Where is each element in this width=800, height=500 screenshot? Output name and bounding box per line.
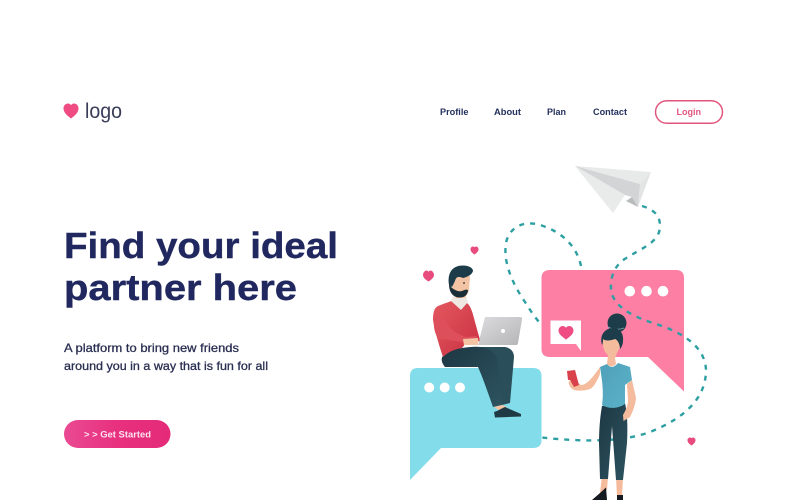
heading: Find your ideal	[64, 225, 338, 266]
woman arm right	[623, 380, 636, 421]
icon: logo heart	[64, 104, 78, 118]
man forearm	[434, 315, 480, 343]
man hand	[463, 338, 478, 345]
icon: heart lower right	[688, 438, 696, 446]
woman arm phone	[569, 367, 600, 391]
woman hair bun	[608, 314, 626, 332]
man hair	[449, 266, 473, 287]
chat bubble: blue	[410, 368, 542, 480]
logo wordmark: logo	[85, 100, 122, 123]
dashed flight path: right route	[537, 206, 706, 440]
man back leg	[480, 347, 514, 405]
nav: Contact: Contact	[593, 107, 627, 117]
woman shoes	[592, 488, 607, 500]
navigation	[440, 107, 627, 117]
login button: Login	[676, 107, 701, 117]
icon: small heart message	[550, 320, 581, 351]
heading	[64, 225, 338, 308]
person: man with laptop	[433, 266, 522, 418]
login button	[656, 101, 722, 123]
man collar	[451, 294, 468, 310]
description text	[64, 341, 268, 373]
heading: partner here	[64, 267, 297, 308]
man neck and face	[452, 276, 470, 298]
description text: around you in a way that is fun for all	[64, 359, 268, 373]
man eye	[463, 282, 465, 284]
pink bubble dots	[624, 286, 668, 297]
logo	[64, 100, 122, 123]
illustration	[410, 166, 706, 500]
person: woman with phone	[567, 314, 636, 500]
laptop	[478, 317, 522, 345]
man beard	[449, 284, 468, 298]
woman trousers	[599, 403, 627, 480]
description text: A platform to bring new friends	[64, 341, 239, 355]
woman phone	[567, 370, 579, 387]
woman hair band	[608, 327, 624, 329]
dashed flight path: left loop	[505, 223, 581, 322]
nav: About: About	[494, 107, 521, 117]
chat bubble: pink	[542, 270, 684, 392]
blue bubble dots	[424, 382, 465, 392]
icon: heart near man left	[423, 270, 434, 282]
woman legs skin	[600, 476, 623, 496]
paper plane	[575, 166, 651, 213]
woman hair	[601, 328, 623, 349]
nav: Profile: Profile	[440, 107, 468, 117]
get started button	[64, 420, 170, 448]
icon: heart near man top	[470, 246, 478, 254]
laptop logo dot	[501, 329, 505, 333]
man ankles	[494, 405, 507, 411]
woman neck and face	[603, 338, 621, 366]
man sweater	[433, 300, 480, 357]
woman tee	[600, 363, 632, 408]
nav: Plan: Plan	[547, 107, 566, 117]
man front leg	[442, 347, 502, 407]
get started button: > > Get Started	[84, 430, 151, 440]
man shoes	[494, 407, 521, 418]
